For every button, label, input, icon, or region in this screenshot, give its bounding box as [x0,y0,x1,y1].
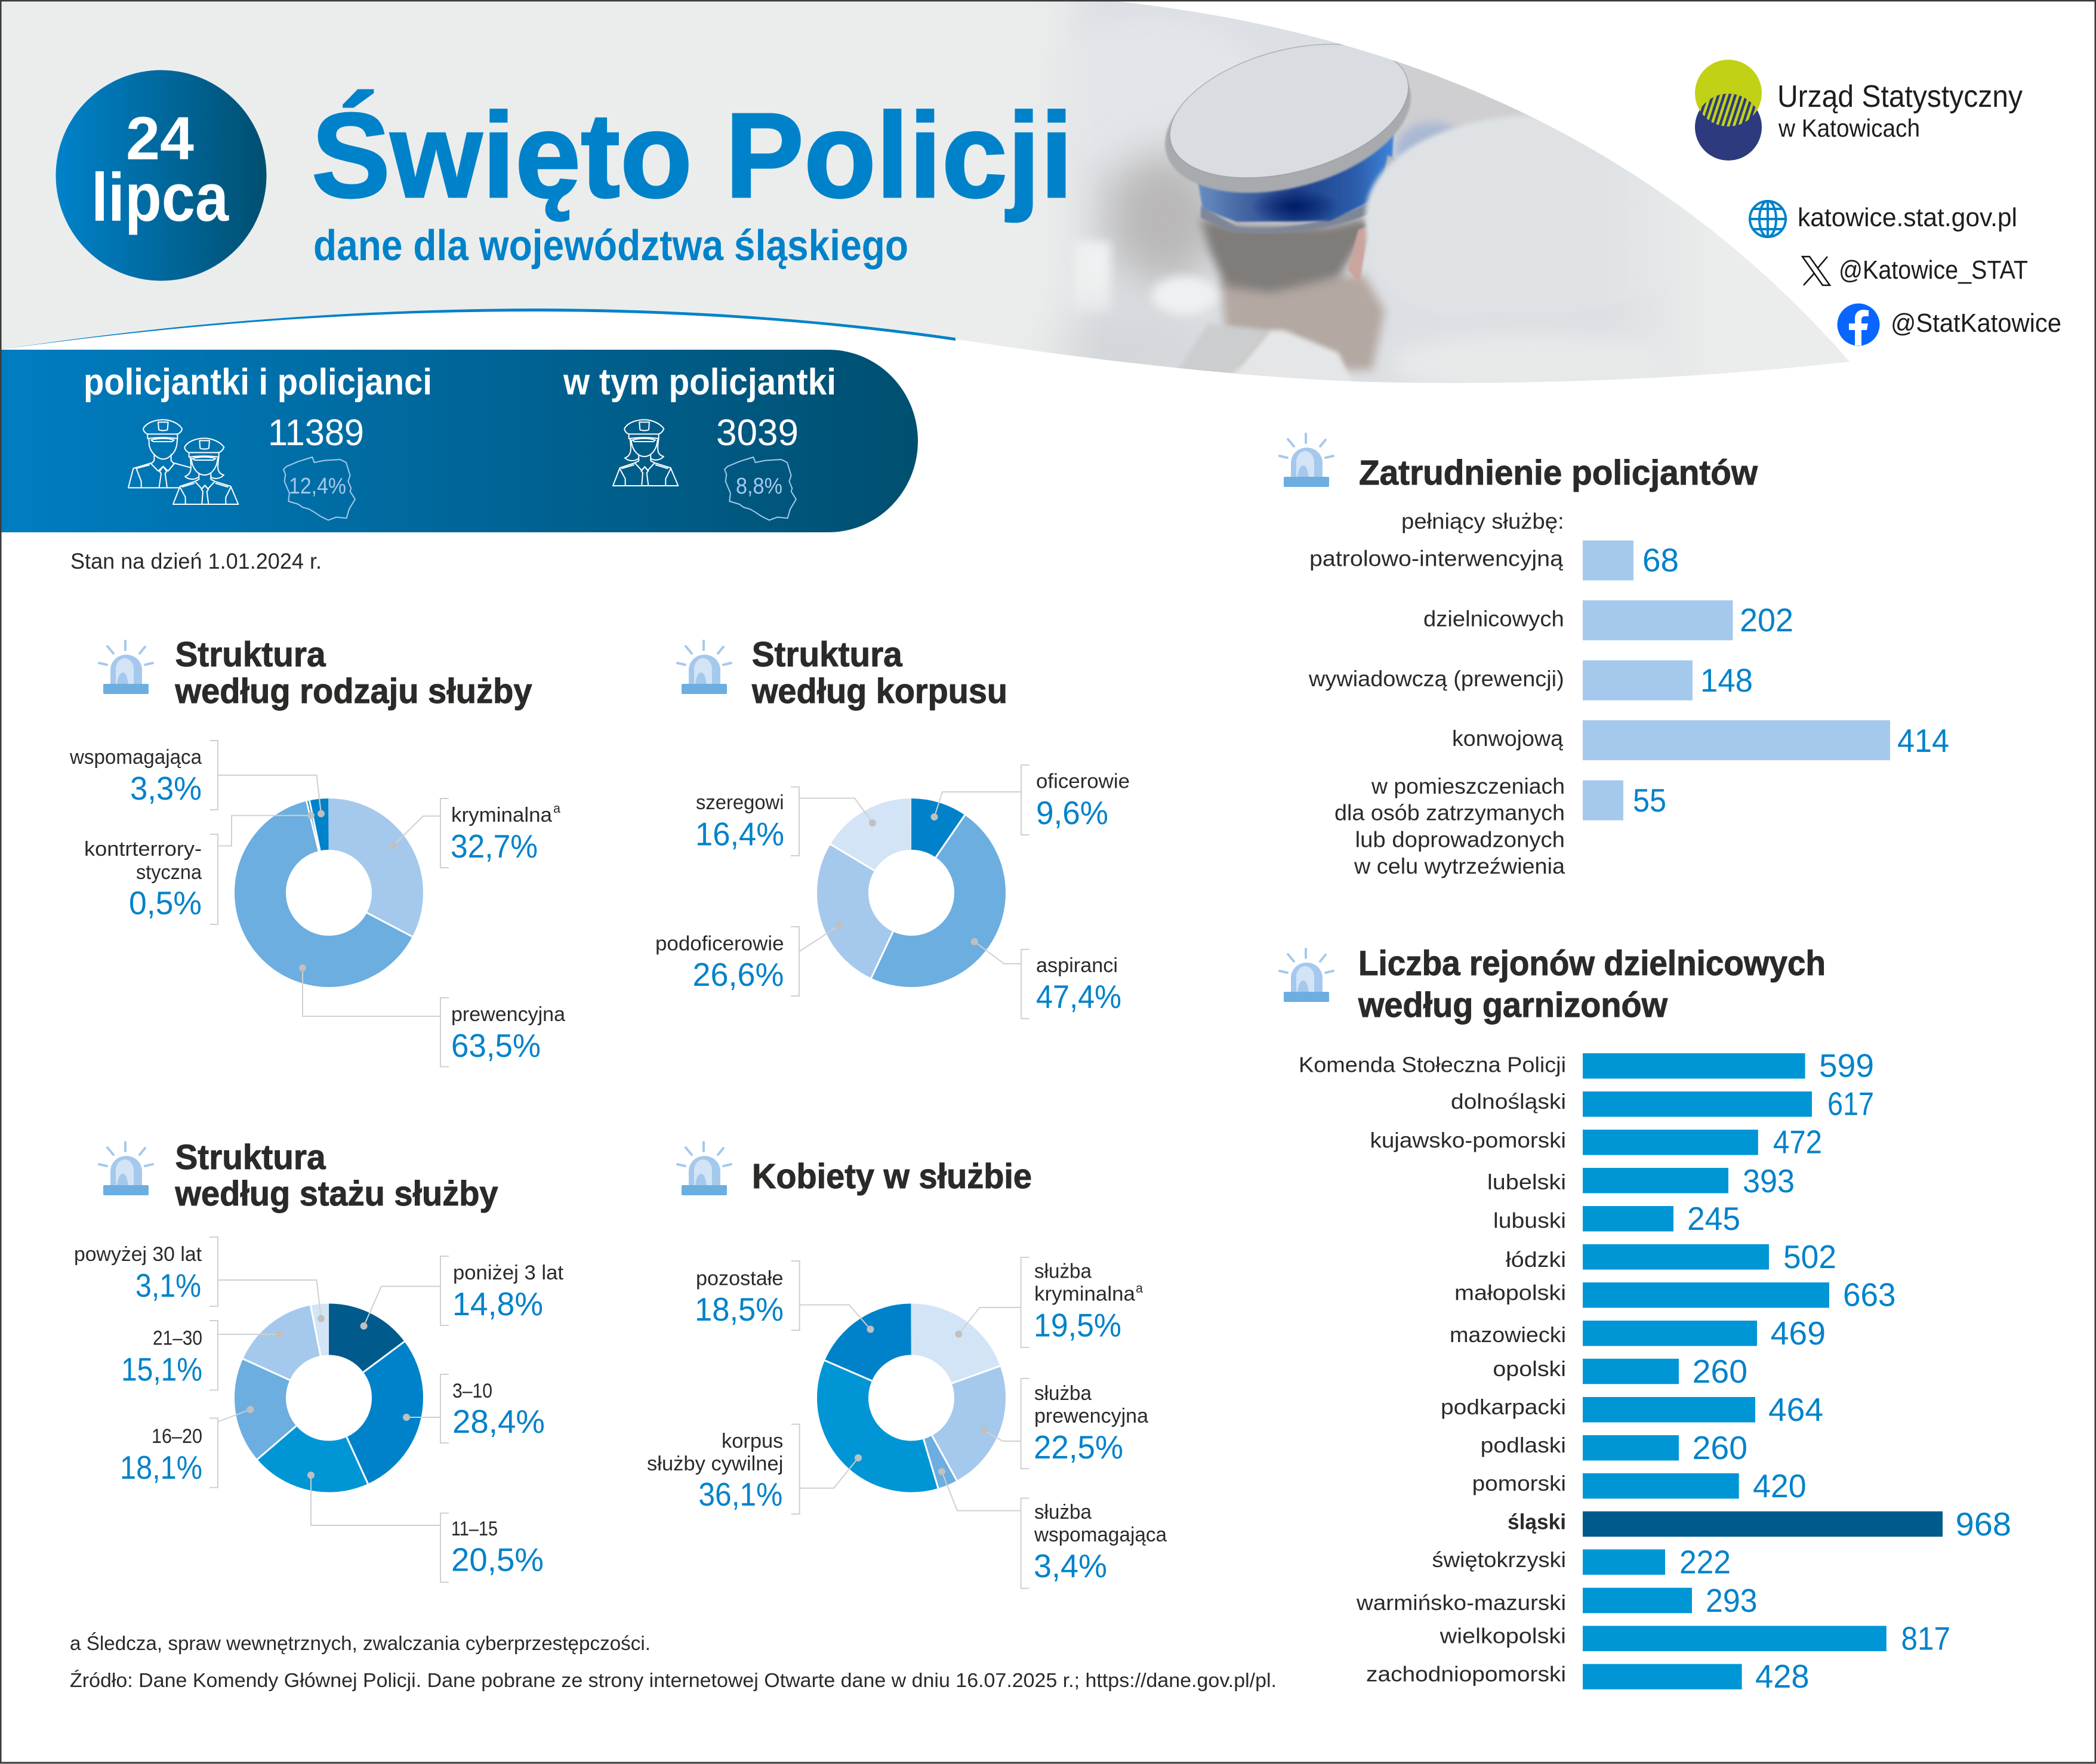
label: pełniący służbę: pełniący służbę: [1401,509,1564,533]
map: share of Poland 8,8% [725,457,796,520]
bar: wywiadowczą: 148 [1700,662,1753,699]
bar: śląski [1508,1506,2011,1543]
logo: Urząd Statystyczny [1695,60,2023,161]
callout: służba prewencyjna: służba [1034,1382,1092,1405]
bar: wywiadowczą: wywiadowczą (prewencji) [1308,667,1564,691]
callout: powyżej 30 lat: 3,1% [135,1267,201,1304]
callout: powyżej 30 lat [74,1237,325,1322]
bar: podkarpacki [1441,1391,1823,1428]
callout: służba wspomagająca: służba [1034,1501,1092,1524]
bar: kujawsko-pomorski: 472 [1773,1124,1822,1161]
bar: małopolski [1454,1276,1895,1313]
bar: zachodniopomorski: zachodniopomorski [1366,1661,1566,1686]
bar: śląski: śląski [1508,1510,1566,1534]
heading [1358,944,1826,1025]
callout: prewencyjna [299,964,565,1067]
heading: Kobiety w służbie [752,1157,1032,1196]
heading: według rodzaju służby [175,672,532,711]
donut chart [242,1305,405,1485]
donut chart [830,814,980,979]
heading [175,635,532,711]
bar: podkarpacki: podkarpacki [1441,1395,1566,1419]
bar: w pomieszczeniach: lub doprowadzonych [1355,827,1565,852]
heading [751,635,1007,711]
callout: służba wspomagająca: 3,4% [1034,1547,1107,1584]
callout: kryminalna: a [553,801,561,816]
callout: poniżej 3 lat: poniżej 3 lat [453,1262,564,1284]
callout: korpus służby cywilnej: służby cywilnej [647,1452,783,1475]
panel: totals banner [0,350,918,532]
bar: lubuski: lubuski [1493,1208,1566,1233]
callout: służba wspomagająca: wspomagająca [1034,1524,1167,1546]
callout: 16–20: 16–20 [152,1425,202,1448]
bar: w pomieszczeniach: 55 [1633,782,1666,819]
bar: mazowiecki: 469 [1771,1315,1826,1352]
bar: lubuski [1493,1200,1740,1237]
bar: warmińsko-mazurski [1356,1582,1757,1619]
callout: służba wspomagająca [938,1468,1167,1589]
title: Święto Policji [312,88,1073,223]
callout: pozostałe [695,1261,874,1333]
callout: kryminalna: 32,7% [451,828,538,865]
panel: Struktura według korpusu [655,635,1130,1019]
bar: w pomieszczeniach: w pomieszczeniach [1371,774,1565,798]
bar: mazowiecki [1450,1315,1826,1352]
callout: oficerowie: oficerowie [1036,770,1130,793]
bar: patrolowo-interwencyjną [1309,541,1679,581]
bar: podlaski [1481,1429,1747,1466]
icon: siren [1280,434,1333,487]
map: share of Poland 12,4%: 12,4% [289,474,346,499]
icon: siren [677,1142,731,1195]
panel: Kobiety w służbie [647,1142,1167,1589]
contact: Facebook: @StatKatowice [1891,309,2061,338]
bar: zachodniopomorski [1366,1658,1810,1695]
callout: służba kryminalna: 19,5% [1034,1307,1121,1344]
callout: służba prewencyjna [981,1378,1148,1469]
callout: kryminalna: kryminalna [451,804,552,827]
bar: wielkopolski [1440,1620,1950,1657]
icon: siren [1280,949,1333,1002]
logo: Urząd Statystyczny: w Katowicach [1778,114,1920,142]
callout: korpus służby cywilnej [647,1424,862,1514]
contact: website: katowice.stat.gov.pl [1798,203,2017,232]
bar: dolnośląski: 617 [1827,1085,1874,1122]
icon: siren [99,1142,153,1195]
panel: Struktura według rodzaju służby [69,635,565,1067]
bar: pomorski [1472,1467,1807,1504]
bar: lubelski [1487,1162,1795,1199]
panel: Struktura według stażu służby [74,1138,564,1582]
bar: opolski [1493,1353,1747,1390]
bar: lubuski: 245 [1687,1200,1740,1237]
bar: dzielnicowych: 202 [1740,602,1793,639]
callout: wspomagająca [69,741,325,818]
callout: 3–10: 3–10 [452,1380,492,1402]
callout: 3–10: 28,4% [452,1403,545,1440]
bar: warmińsko-mazurski: warmińsko-mazurski [1356,1590,1566,1615]
callout: podoficerowie: podoficerowie [655,932,784,955]
callout: powyżej 30 lat: powyżej 30 lat [74,1243,202,1266]
bar: w pomieszczeniach [1334,774,1666,878]
bar: lubelski: lubelski [1487,1170,1566,1194]
callout: pozostałe: pozostałe [696,1268,783,1290]
callout: 11–15: 20,5% [451,1541,544,1578]
callout: pozostałe: 18,5% [695,1291,784,1328]
callout: wspomagająca: 3,3% [130,770,202,807]
bar: kujawsko-pomorski: kujawsko-pomorski [1370,1128,1566,1152]
bar: pomorski: pomorski [1472,1471,1566,1495]
bar: konwojową: 414 [1897,722,1949,759]
bar: śląski: 968 [1956,1506,2011,1543]
callout: służba kryminalna: a [1136,1281,1143,1296]
panel: Liczba rejonów dzielnicowych [1280,944,2011,1695]
panel: Zatrudnienie policjantów [1280,434,1949,878]
bar: świętokrzyski: świętokrzyski [1432,1547,1566,1572]
bar: konwojową: konwojową [1452,726,1563,751]
bar: podkarpacki: 464 [1768,1391,1823,1428]
callout: kontrterrorystyczna [84,812,315,924]
text: w tym policjantki: w tym policjantki [563,362,836,403]
heading: Struktura [752,635,902,674]
callout: kontrterrorystyczna: styczna [136,861,202,884]
callout: służba prewencyjna: 22,5% [1034,1429,1123,1466]
callout: podoficerowie [655,922,843,996]
callout: 11–15 [307,1472,544,1582]
callout: kontrterrorystyczna: 0,5% [129,884,202,921]
bar: Komenda Stołeczna Policji [1299,1047,1874,1084]
callout: 21–30: 21–30 [153,1327,202,1350]
bar: świętokrzyski [1432,1544,1731,1581]
heading: Zatrudnienie policjantów [1359,454,1758,492]
callout: aspiranci: aspiranci [1036,954,1118,977]
heading: według korpusu [751,672,1007,711]
callout: wspomagająca: wspomagająca [69,746,202,769]
icon: siren [677,641,731,694]
callout: oficerowie: 9,6% [1036,794,1108,831]
contact: website [1750,201,2017,237]
header background with photo [1,1,1850,383]
number: 11389: 11389 [268,412,364,454]
bar: w pomieszczeniach: w celu wytrzeźwienia [1354,854,1565,878]
bar: wielkopolski: 817 [1901,1620,1950,1657]
callout: aspiranci [971,938,1121,1019]
heading: według garnizonów [1358,986,1668,1025]
callout: służba kryminalna [955,1257,1143,1347]
subtitle: dane dla województwa śląskiego [313,222,908,270]
badge: 24 lipca: lipca [91,160,229,236]
icon: two officers [128,420,238,504]
bar: lubelski: 393 [1743,1162,1795,1199]
icon: female officer [613,420,678,486]
bar: patrolowo-interwencyjną: 68 [1642,542,1679,579]
bar: Komenda Stołeczna Policji: 599 [1819,1047,1874,1084]
decorative blue wave line [0,309,955,350]
heading [175,1138,498,1213]
callout: podoficerowie: 26,6% [692,956,784,993]
bar: dzielnicowych: dzielnicowych [1423,606,1564,631]
heading: Struktura [175,1138,326,1177]
logo: Urząd Statystyczny: Urząd Statystyczny [1777,79,2023,114]
contact: X: @Katowice_STAT [1839,255,2028,285]
heading: według stażu służby [175,1174,498,1213]
contact: Facebook [1837,303,2061,346]
bar: świętokrzyski: 222 [1679,1544,1731,1581]
bar: podlaski: 260 [1693,1429,1747,1466]
bar: podlaski: podlaski [1481,1433,1566,1457]
footnote: a Śledcza, spraw wewnętrznych, zwalczania cyberprzestępczości. [70,1632,651,1654]
callout: 21–30 [121,1321,283,1390]
bar: dolnośląski: dolnośląski [1451,1089,1566,1114]
bar: kujawsko-pomorski [1370,1124,1822,1161]
icon: siren [99,641,153,694]
bar: łódzki [1506,1238,1836,1275]
map: share of Poland 8,8%: 8,8% [736,474,782,499]
bar: wywiadowczą [1308,661,1753,701]
callout: 3–10 [403,1374,545,1443]
bar: pomorski: 420 [1753,1467,1807,1504]
text: policjantki i policjanci: policjantki i policjanci [84,362,432,403]
donut chart [824,1330,1001,1489]
callout: prewencyjna: 63,5% [451,1027,541,1064]
badge: 24 lipca [56,70,266,280]
callout: kontrterrorystyczna: kontrterrory- [84,838,202,861]
date note: Stan na dzień 1.01.2024 r. [70,549,322,573]
number: 3039: 3039 [716,412,799,454]
bar: łódzki: łódzki [1506,1247,1566,1272]
bar: łódzki: 502 [1783,1238,1836,1275]
callout: 11–15: 11–15 [451,1518,498,1540]
callout: korpus służby cywilnej: 36,1% [698,1476,782,1513]
callout: poniżej 3 lat: 14,8% [452,1285,543,1322]
map: share of Poland 12,4% [283,457,355,520]
bar: mazowiecki: mazowiecki [1450,1322,1566,1347]
bar: opolski: 260 [1693,1353,1747,1390]
callout: 21–30: 15,1% [121,1351,202,1388]
heading: Liczba rejonów dzielnicowych [1358,944,1826,983]
bar: patrolowo-interwencyjną: patrolowo-interwencyjną [1309,547,1563,570]
callout: 16–20 [120,1406,254,1488]
callout: 16–20: 18,1% [120,1449,202,1486]
callout: służba prewencyjna: prewencyjna [1034,1405,1148,1427]
callout: oficerowie [931,765,1130,835]
bar: wielkopolski: wielkopolski [1440,1624,1566,1648]
bar: Komenda Stołeczna Policji: Komenda Stołeczna Policji [1299,1052,1566,1077]
bar: dzielnicowych [1423,600,1793,640]
callout: szeregowi: 16,4% [695,815,784,852]
callout: aspiranci: 47,4% [1036,978,1121,1015]
callout: korpus służby cywilnej: korpus [722,1430,783,1452]
callout: służba kryminalna: służba [1034,1260,1092,1283]
bar: konwojową [1452,720,1949,760]
callout: szeregowi [695,787,876,856]
bar: w pomieszczeniach: dla osób zatrzymanych [1334,801,1565,825]
bar: dolnośląski [1451,1085,1874,1122]
bar: małopolski: 663 [1843,1276,1895,1313]
donut chart [260,799,414,961]
callout: kryminalna [390,798,561,868]
callout: prewencyjna: prewencyjna [451,1003,565,1026]
badge: 24 lipca: 24 [126,104,194,172]
callout: służba kryminalna: kryminalna [1034,1283,1135,1306]
bar: warmińsko-mazurski: 293 [1706,1582,1757,1619]
bar: małopolski: małopolski [1454,1281,1566,1305]
callout: poniżej 3 lat [360,1256,564,1330]
callout: szeregowi: szeregowi [696,791,784,814]
bar: zachodniopomorski: 428 [1755,1658,1810,1695]
heading: Struktura [175,635,326,674]
bar: opolski: opolski [1493,1356,1566,1381]
source note: Źródło: Dane Komendy Głównej Policji. Dane pobrane ze strony internetowej Otwarte dane w dniu 16.07.2025 r.; https://dane.gov.pl/pl. [70,1669,1277,1691]
